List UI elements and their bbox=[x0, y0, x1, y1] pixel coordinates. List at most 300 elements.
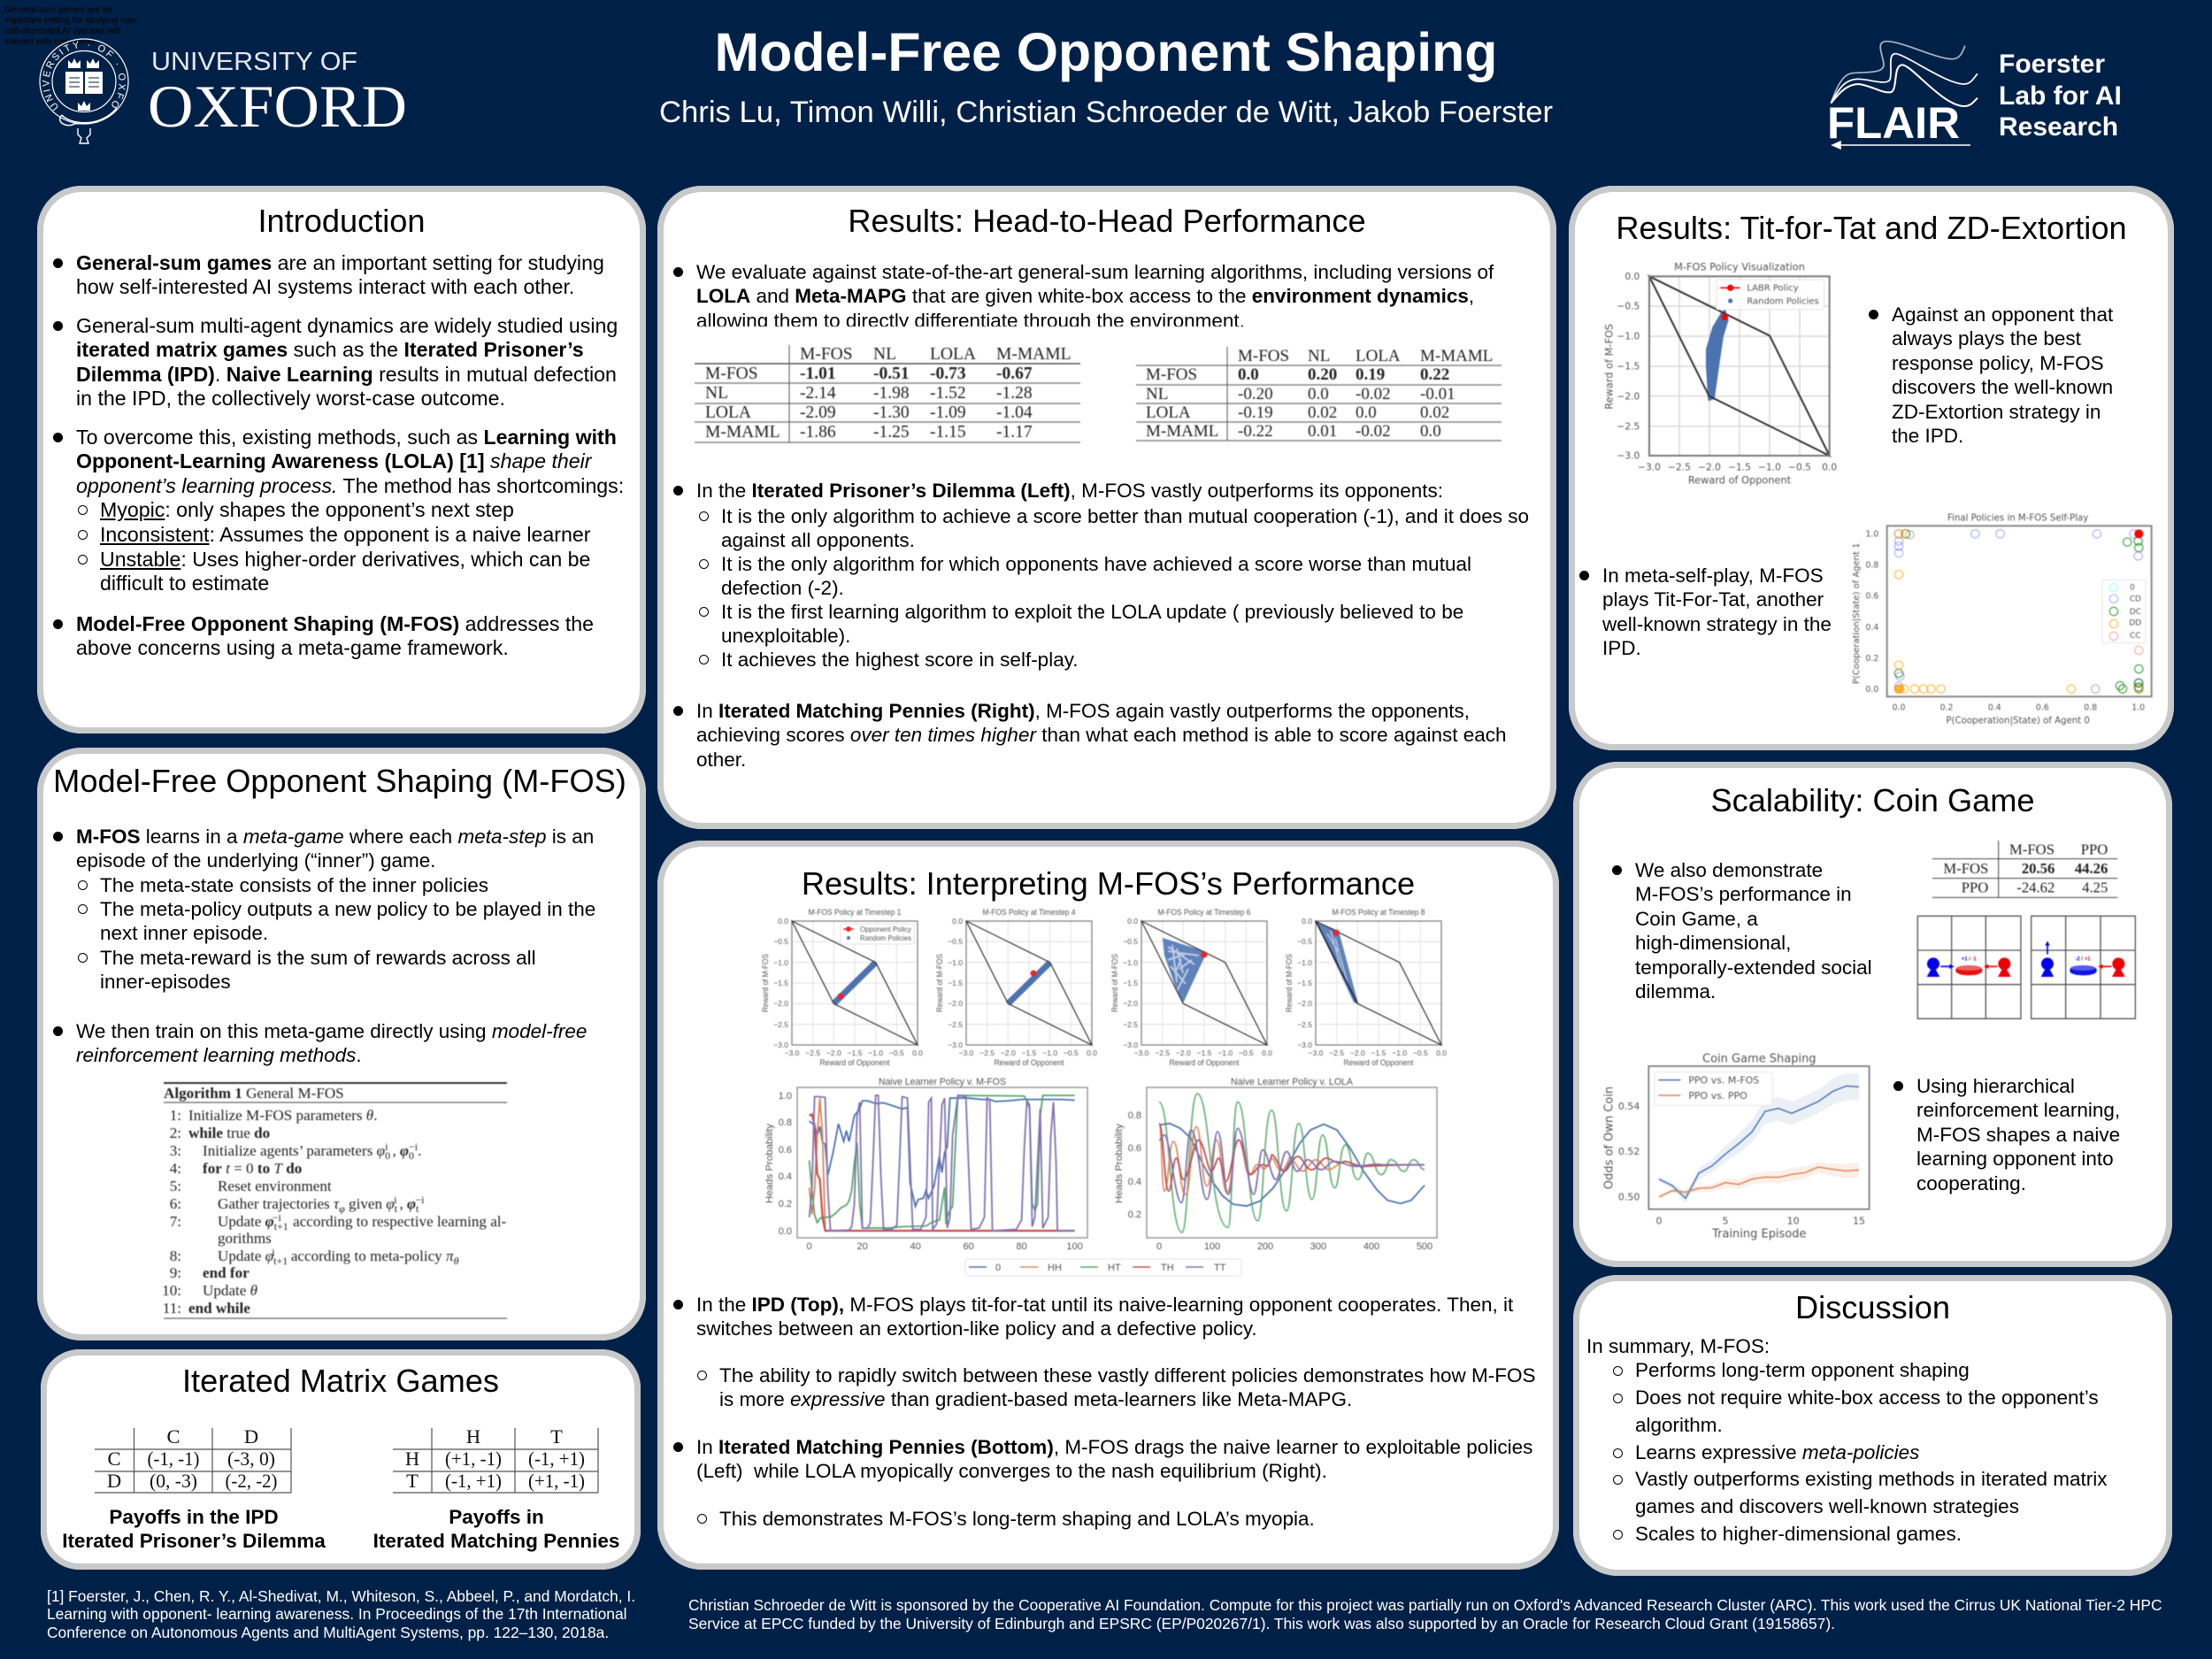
chart: M-FOS policy visualization: −2.5 bbox=[1668, 462, 1691, 473]
chart: naive learner policy v. M-FOS: Naive Learner Policy v. M-FOS bbox=[879, 1077, 1006, 1087]
bullet: ZD-extortion: ZD-Extortion strategy in bbox=[1892, 401, 2101, 423]
chart: policy at timestep 4: −1.0 bbox=[1042, 1048, 1057, 1057]
chart: M-FOS policy visualization: −1.5 bbox=[1728, 462, 1751, 473]
chart: final policies in self-play: CD bbox=[2130, 595, 2141, 603]
algorithm text: 5: bbox=[170, 1178, 181, 1194]
x-axis labels: right chart: 0 bbox=[1156, 1241, 1162, 1252]
chart: naive learner policy v. LOLA: 0.8 bbox=[1128, 1110, 1141, 1121]
bullet: hierarchical RL: cooperating. bbox=[1916, 1172, 2026, 1194]
x-axis labels: right chart: 100 bbox=[1204, 1241, 1220, 1252]
diagram: coin game right bbox=[2032, 916, 2135, 1018]
chart: policy at timestep 8: M-FOS Policy at Timestep 8 bbox=[1333, 908, 1425, 918]
table: IPD results: -1.01 bbox=[800, 365, 836, 383]
chart: naive learner policy v. M-FOS: 0.2 bbox=[779, 1199, 792, 1210]
chart: policy at timestep 6: −1.5 bbox=[1123, 979, 1138, 987]
chart: naive learner policy v. M-FOS: Heads Probability bbox=[764, 1123, 775, 1203]
algorithm text: Update θ bbox=[203, 1282, 257, 1299]
table: IPD results: -1.98 bbox=[873, 384, 910, 403]
algorithm text: while true do bbox=[188, 1125, 270, 1141]
panel: tit-for-tat and ZD-extortion bbox=[1569, 186, 2174, 750]
table: matching pennies results: M-FOS bbox=[1238, 347, 1289, 365]
table: IPD results: -0.67 bbox=[996, 365, 1033, 383]
chart: final policies in self-play: 0.4 bbox=[1988, 703, 2001, 713]
table: IPD payoffs: (-1, -1) bbox=[147, 1448, 200, 1470]
text: lab name bbox=[1999, 50, 2122, 142]
chart: policy at timestep 8 bbox=[1285, 908, 1447, 1068]
table: IPD payoffs: (-2, -2) bbox=[225, 1470, 278, 1492]
x-axis labels: right chart: 400 bbox=[1363, 1241, 1379, 1252]
chart: policy at timestep 8: −2.5 bbox=[1329, 1048, 1344, 1057]
table: coin game results: 20.56 bbox=[2022, 860, 2055, 877]
chart: policy at timestep 4: −2.0 bbox=[1001, 1048, 1016, 1057]
algorithm text: φ bbox=[386, 1195, 395, 1212]
bullet: LOLA: Opponent-Learning Awareness (LOLA) [1] shape their bbox=[76, 449, 591, 472]
x-axis labels: right chart: 200 bbox=[1257, 1241, 1273, 1252]
table: matching pennies payoffs: H bbox=[405, 1448, 419, 1470]
table: coin game results: 4.25 bbox=[2082, 879, 2108, 895]
bullet: ZD-extortion: Against an opponent that bbox=[1892, 303, 2113, 326]
diagram: coin game left bbox=[1917, 916, 2021, 1018]
panel: discussion bbox=[1573, 1275, 2172, 1576]
chart: final policies in self-play: P(Cooperation|State) of Agent 0 bbox=[1946, 716, 2090, 726]
chart: policy at timestep 1: −1.0 bbox=[868, 1048, 883, 1057]
panel: iterated matrix games bbox=[41, 1349, 641, 1570]
sub-bullet: best score: It is the only algorithm to achieve a score better than mutual cooperation (-1), and it does so bbox=[721, 505, 1529, 527]
footer: reference: [1] Foerster, J., Chen, R. Y., Al-Shedivat, M., Whiteson, S., Abbeel, P., and Mordatch, I. bbox=[47, 1587, 635, 1605]
table: IPD results: -0.73 bbox=[930, 365, 966, 383]
chart: naive learner policy v. M-FOS bbox=[764, 1077, 1087, 1238]
sub-bullet: worst for opponents bbox=[721, 552, 1471, 601]
x-axis labels: left chart: 100 bbox=[1066, 1241, 1083, 1252]
bullet: coin game: dilemma. bbox=[1635, 980, 1716, 1002]
bullet: matching pennies results: other. bbox=[696, 749, 746, 771]
chart: coin game shaping: PPO vs. M-FOS bbox=[1688, 1075, 1759, 1087]
sub-bullet: outperforms: Vastly outperforms existing methods in iterated matrix bbox=[1635, 1468, 2108, 1490]
bullet: general-sum games bbox=[76, 251, 604, 300]
chart: policy at timestep 1: −1.5 bbox=[848, 1048, 863, 1057]
overlapping small note: interact with each other. bbox=[4, 37, 98, 47]
sub-bullet: meta-policy bbox=[100, 897, 595, 946]
chart: policy at timestep 8: −0.5 bbox=[1413, 1048, 1428, 1057]
sub-bullet: unstable: difficult to estimate bbox=[100, 572, 269, 595]
algorithm text: end while bbox=[188, 1300, 250, 1317]
bullet: hierarchical RL bbox=[1916, 1074, 2120, 1195]
chart: policy at timestep 8: −1.5 bbox=[1297, 979, 1312, 987]
algorithm text bbox=[162, 1085, 507, 1317]
table: IPD results: -1.28 bbox=[996, 384, 1033, 403]
chart: policy at timestep 8: −3.0 bbox=[1297, 1041, 1312, 1049]
x-axis labels: left chart: 60 bbox=[963, 1241, 974, 1252]
algorithm text: end for bbox=[203, 1264, 250, 1281]
sub-bullet: worst for opponents: defection (-2). bbox=[721, 577, 844, 599]
chart: final policies in self-play: 0.8 bbox=[2084, 703, 2097, 713]
text: lab name: Lab for AI bbox=[1999, 81, 2122, 111]
algorithm text: −i bbox=[415, 1194, 425, 1206]
logo: FLAIR bbox=[1827, 41, 2122, 150]
bullet: IPD top: switches between an extortion-like policy and a defective policy. bbox=[696, 1317, 1257, 1340]
algorithm text: 4: bbox=[170, 1160, 181, 1177]
bullet: ZD-extortion: always plays the best bbox=[1892, 327, 2081, 349]
bullet: multi-agent dynamics bbox=[76, 314, 618, 411]
bullet: tit-for-tat: plays Tit-For-Tat, another bbox=[1602, 588, 1824, 611]
chart: M-FOS policy visualization: Reward of M-FOS bbox=[1602, 324, 1615, 410]
chart: policy at timestep 6: −1.0 bbox=[1217, 1048, 1233, 1057]
chart: policy at timestep 6: −2.5 bbox=[1123, 1020, 1138, 1029]
sub-bullet: best score bbox=[721, 504, 1529, 553]
chart: naive learner policy v. LOLA: Heads Probability bbox=[1114, 1123, 1125, 1203]
chart: M-FOS policy visualization: Reward of Opponent bbox=[1688, 474, 1792, 487]
chart: policy at timestep 8: 0.0 bbox=[1302, 917, 1312, 926]
chart: policy at timestep 8: −1.0 bbox=[1297, 958, 1312, 967]
bullet: hierarchical RL: reinforcement learning, bbox=[1916, 1099, 2120, 1121]
table: IPD results: M-FOS bbox=[800, 345, 853, 364]
sub-bullet: meta-reward bbox=[100, 946, 536, 995]
sub-bullet: exploit LOLA bbox=[721, 600, 1463, 649]
table: matching pennies results: M-FOS bbox=[1146, 365, 1197, 384]
table: IPD results: -1.15 bbox=[930, 423, 966, 442]
table: IPD results: -0.51 bbox=[873, 365, 910, 383]
chart: policy at timestep 4: −1.5 bbox=[1022, 1048, 1037, 1057]
heading: Results: Interpreting M-FOS’s Performance bbox=[802, 865, 1415, 902]
caption: IPD: Iterated Prisoner’s Dilemma bbox=[62, 1530, 326, 1552]
algorithm text: π bbox=[446, 1248, 454, 1264]
algorithm text: for t = 0 to T do bbox=[203, 1160, 302, 1177]
panel: model-free opponent shaping bbox=[37, 748, 646, 1340]
bullet: meta-game: episode of the underlying (“inner”) game. bbox=[76, 849, 435, 872]
chart: policy at timestep 6: −3.0 bbox=[1134, 1048, 1149, 1057]
chart: policy at timestep 6: −0.5 bbox=[1239, 1048, 1254, 1057]
heading: Iterated Matrix Games bbox=[182, 1363, 499, 1399]
sub-bullet: exploit LOLA: It is the first learning algorithm to exploit the LOLA update ( previously believed to be bbox=[721, 601, 1463, 623]
chart: M-FOS policy visualization: −2.0 bbox=[1617, 390, 1640, 402]
bullet: coin game: M-FOS’s performance in bbox=[1635, 883, 1852, 905]
algorithm text: Update φ bbox=[218, 1213, 274, 1230]
chart: coin game shaping: Odds of Own Coin bbox=[1602, 1087, 1616, 1189]
x-axis labels: left chart: 80 bbox=[1016, 1241, 1027, 1252]
table: IPD payoffs: (-3, 0) bbox=[227, 1448, 275, 1470]
chart: policy at timestep 1: M-FOS Policy at Timestep 1 bbox=[809, 908, 901, 918]
chart: coin game shaping: 5 bbox=[1722, 1215, 1728, 1226]
bullet: IPD top: In the IPD (Top), M-FOS plays tit-for-tat until its naive-learning opponent cooperates. Then, it bbox=[696, 1294, 1513, 1316]
table: IPD results: -1.09 bbox=[930, 403, 966, 422]
diagram: coin game left: +1 / -1 bbox=[1962, 956, 1978, 962]
text: FLAIR: FLAIR bbox=[1827, 98, 1960, 148]
chart: final policies in self-play: P(Cooperation|State) of Agent 1 bbox=[1852, 542, 1862, 684]
text: Oxford: OXFORD bbox=[148, 73, 407, 140]
bullet: multi-agent dynamics: in the IPD, the collectively worst-case outcome. bbox=[76, 387, 505, 410]
table: matching pennies results: M-MAML bbox=[1420, 347, 1493, 365]
text: lab name: Foerster bbox=[1999, 50, 2105, 79]
heading: Model-Free Opponent Shaping (M-FOS) bbox=[53, 763, 626, 799]
chart: policy at timestep 8: Reward of M-FOS bbox=[1285, 954, 1294, 1012]
chart: final policies in self-play: 0.2 bbox=[1940, 703, 1953, 713]
legend bbox=[965, 1259, 1241, 1276]
chart: policy at timestep 8: −2.0 bbox=[1350, 1048, 1365, 1057]
table: matching pennies results: LOLA bbox=[1146, 403, 1191, 422]
bullet: hierarchical RL: Using hierarchical bbox=[1916, 1075, 2075, 1097]
table: IPD payoffs: (0, -3) bbox=[150, 1470, 197, 1492]
chart: M-FOS policy visualization: −1.0 bbox=[1758, 462, 1781, 473]
algorithm text: Algorithm 1 General M-FOS bbox=[164, 1085, 344, 1102]
text: University of: UNIVERSITY OF bbox=[151, 48, 357, 76]
table: IPD payoffs: D bbox=[244, 1425, 258, 1448]
caption: matching pennies: Payoffs in bbox=[449, 1506, 544, 1528]
chart: policy at timestep 8: −1.5 bbox=[1371, 1048, 1386, 1057]
legend: HT bbox=[1108, 1263, 1121, 1273]
chart: policy at timestep 4: −0.5 bbox=[1064, 1048, 1079, 1057]
table: coin game results: PPO bbox=[1962, 879, 1988, 895]
chart: naive learner policy v. LOLA: Naive Learner Policy v. LOLA bbox=[1231, 1077, 1354, 1087]
table: matching pennies results: NL bbox=[1146, 385, 1168, 403]
chart: coin game shaping: 0.54 bbox=[1618, 1101, 1640, 1112]
table: IPD results: -1.04 bbox=[996, 403, 1033, 422]
chart: policy at timestep 1: 0.0 bbox=[778, 917, 788, 926]
sub-bullet: unstable: Unstable: Uses higher-order derivatives, which can be bbox=[100, 548, 590, 571]
bullet: meta-game bbox=[76, 825, 594, 873]
table: matching pennies results: -0.22 bbox=[1238, 422, 1273, 441]
chart: naive learner policy v. M-FOS: 0.8 bbox=[779, 1118, 792, 1128]
sub-bullet: meta-state: The meta-state consists of the inner policies bbox=[100, 874, 488, 896]
chart: final policies in self-play: 1.0 bbox=[2131, 703, 2145, 713]
x-axis labels: right chart bbox=[1156, 1241, 1432, 1252]
bullet: multi-agent dynamics: Dilemma (IPD). Naive Learning results in mutual defection bbox=[76, 363, 617, 386]
table: IPD results: -1.52 bbox=[930, 384, 966, 403]
sub-bullet: myopic: Myopic: only shapes the opponent’s next step bbox=[100, 498, 514, 521]
chart: final policies in self-play: 0.6 bbox=[2036, 703, 2049, 713]
bullet: hierarchical RL: learning opponent into bbox=[1916, 1148, 2114, 1170]
algorithm text: 7: bbox=[170, 1213, 181, 1230]
algorithm text: θ bbox=[454, 1255, 459, 1267]
panel: introduction bbox=[37, 186, 646, 733]
algorithm text: 10: bbox=[162, 1282, 181, 1299]
chart: M-FOS policy visualization: −3.0 bbox=[1617, 450, 1640, 462]
chart: M-FOS policy visualization: Random Policies bbox=[1747, 296, 1819, 306]
chart: naive learner policy v. LOLA: 0.4 bbox=[1128, 1177, 1141, 1187]
x-axis labels: left chart: 0 bbox=[807, 1241, 812, 1252]
chart: coin game shaping: 0.52 bbox=[1618, 1146, 1640, 1157]
algorithm text: according to respective learning al- bbox=[289, 1213, 507, 1230]
bullet: ZD-extortion bbox=[1892, 303, 2113, 448]
table: coin game results: M-FOS bbox=[2009, 841, 2055, 857]
table: IPD results: -1.25 bbox=[873, 423, 910, 442]
bullet: hierarchical RL: M-FOS shapes a naive bbox=[1916, 1124, 2120, 1146]
chart: coin game shaping: 0 bbox=[1655, 1215, 1662, 1226]
chart: policy at timestep 4: −3.0 bbox=[959, 1048, 974, 1057]
chart: policy at timestep 4: −2.5 bbox=[948, 1020, 963, 1029]
chart: final policies in self-play: DC bbox=[2130, 608, 2141, 617]
bullet: coin game: Coin Game, a bbox=[1635, 908, 1758, 930]
chart: M-FOS policy visualization: −3.0 bbox=[1638, 462, 1661, 473]
chart: policy at timestep 6: 0.0 bbox=[1262, 1048, 1272, 1057]
chart: policy at timestep 1: −0.5 bbox=[889, 1048, 904, 1057]
icon: Oxford seal bbox=[39, 38, 129, 144]
chart: policy at timestep 4: −0.5 bbox=[948, 937, 963, 946]
chart: final policies in self-play: 0.6 bbox=[1865, 592, 1878, 602]
chart: final policies in self-play: 0 bbox=[2130, 583, 2135, 592]
table: matching pennies results: -0.02 bbox=[1356, 385, 1391, 403]
table: matching pennies results: LOLA bbox=[1356, 347, 1401, 365]
footer: acknowledgements bbox=[688, 1596, 2162, 1632]
sub-bullet: no white-box bbox=[1635, 1385, 2099, 1440]
algorithm text: −i bbox=[273, 1211, 282, 1224]
chart: M-FOS policy visualization: −0.5 bbox=[1788, 462, 1811, 473]
table: IPD payoffs: C bbox=[166, 1425, 180, 1448]
chart: policy at timestep 6: M-FOS Policy at Timestep 6 bbox=[1157, 908, 1251, 918]
algorithm text: 9: bbox=[170, 1264, 181, 1281]
table: IPD payoffs: D bbox=[107, 1470, 121, 1492]
algorithm text: t bbox=[416, 1202, 419, 1215]
table: coin game results bbox=[1932, 841, 2117, 897]
chart: M-FOS policy visualization: −0.5 bbox=[1617, 301, 1640, 312]
algorithm text: 0 bbox=[385, 1149, 390, 1162]
heading: Discussion bbox=[1795, 1289, 1950, 1325]
chart: coin game shaping bbox=[1602, 1053, 1870, 1240]
sub-bullet: meta-policy: next inner episode. bbox=[100, 922, 268, 944]
text: lab name: Research bbox=[1999, 112, 2118, 142]
table: matching pennies results: NL bbox=[1308, 347, 1330, 365]
logo: University of Oxford bbox=[39, 38, 407, 144]
sub-bullet: exploit LOLA: unexploitable). bbox=[721, 625, 850, 647]
chart: M-FOS policy visualization bbox=[1602, 260, 1837, 487]
chart: policy at timestep 6: Reward of Opponent bbox=[1170, 1058, 1240, 1068]
overlapping small note: General-sum games are an bbox=[4, 5, 112, 15]
sub-bullet: meta-reward: inner-episodes bbox=[100, 971, 231, 993]
figure: interpretation charts bbox=[761, 908, 1448, 1239]
chart: policy at timestep 1: −0.5 bbox=[773, 937, 788, 946]
chart: final policies in self-play: 0.2 bbox=[1865, 654, 1878, 664]
algorithm text: −i bbox=[409, 1141, 419, 1153]
summary intro: In summary, M-FOS: bbox=[1586, 1335, 1770, 1357]
table: IPD payoffs: C bbox=[107, 1448, 121, 1470]
chart: policy at timestep 1: −2.0 bbox=[826, 1048, 841, 1057]
algorithm text: gorithms bbox=[218, 1230, 272, 1247]
chart: final policies in self-play: 0.4 bbox=[1865, 623, 1878, 633]
table: IPD results: -1.30 bbox=[873, 403, 910, 422]
bullet: IPD results: In the Iterated Prisoner’s Dilemma (Left), M-FOS vastly outperforms its opponents: bbox=[696, 480, 1443, 502]
chart: final policies in self-play: CC bbox=[2130, 632, 2141, 641]
overlapping small note: important setting for studying how bbox=[4, 16, 137, 26]
bullet: evaluation: allowing them to directly differentiate through the environment. bbox=[696, 310, 1245, 332]
sub-bullet: self-play: It achieves the highest score in self-play. bbox=[721, 649, 1079, 671]
bullet: train: reinforcement learning methods. bbox=[76, 1044, 362, 1066]
chart: policy at timestep 1: −2.5 bbox=[773, 1020, 788, 1029]
chart: policy at timestep 8: 0.0 bbox=[1436, 1048, 1447, 1057]
algorithm text: , bbox=[399, 1195, 407, 1212]
title: Model-Free Opponent Shaping bbox=[715, 22, 1497, 82]
chart: policy at timestep 6: −2.0 bbox=[1176, 1048, 1191, 1057]
bullet: coin game bbox=[1635, 858, 1872, 1003]
panel: head-to-head performance bbox=[657, 186, 1556, 829]
chart: final policies in self-play: 0.0 bbox=[1865, 685, 1878, 695]
bullet: matching pennies results: In Iterated Matching Pennies (Right), M-FOS again vastly outperforms the opponents, bbox=[696, 700, 1470, 722]
chart: policy at timestep 1: 0.0 bbox=[912, 1048, 923, 1057]
table: coin game results: M-FOS bbox=[1943, 860, 1988, 877]
bullet: general-sum games: how self-interested AI systems interact with each other. bbox=[76, 275, 574, 298]
heading: Scalability: Coin Game bbox=[1710, 782, 2035, 818]
bullet: IPD top bbox=[696, 1293, 1513, 1341]
chart: policy at timestep 1: Opponent Policy bbox=[860, 925, 912, 933]
chart: final policies in self-play: Final Policies in M-FOS Self-Play bbox=[1947, 514, 2088, 524]
algorithm text: i bbox=[394, 1194, 397, 1206]
bullet: tit-for-tat: well-known strategy in the bbox=[1602, 613, 1832, 635]
sub-bullet: outperforms: games and discovers well-known strategies bbox=[1635, 1495, 2019, 1517]
sub-bullet: long-term shaping: This demonstrates M-FOS’s long-term shaping and LOLA’s myopia. bbox=[719, 1508, 1315, 1530]
algorithm text: 3: bbox=[170, 1142, 181, 1159]
chart: policy at timestep 1: −3.0 bbox=[785, 1048, 800, 1057]
table: IPD results: NL bbox=[705, 384, 728, 403]
chart: coin game shaping: 10 bbox=[1787, 1215, 1800, 1226]
payoff tables bbox=[62, 1425, 619, 1552]
bullet: evaluation: We evaluate against state-of-the-art general-sum learning algorithms, including versions of bbox=[696, 261, 1494, 283]
chart: policy at timestep 8: −1.0 bbox=[1392, 1048, 1407, 1057]
sub-bullet: worst for opponents: It is the only algorithm for which opponents have achieved a score worse than mutual bbox=[721, 553, 1471, 575]
caption: matching pennies: Iterated Matching Pennies bbox=[373, 1530, 619, 1552]
heading: Results: Tit-for-Tat and ZD-Extortion bbox=[1616, 210, 2127, 246]
chart: M-FOS policy visualization: −1.0 bbox=[1617, 331, 1640, 342]
algorithm text: Gather trajectories τ bbox=[218, 1195, 339, 1212]
chart: policy at timestep 4: 0.0 bbox=[1087, 1048, 1097, 1057]
sub-bullet: no white-box: Does not require white-box access to the opponent’s bbox=[1635, 1386, 2099, 1409]
bullet: matching pennies results bbox=[696, 699, 1507, 772]
table: matching pennies results: 0.02 bbox=[1308, 403, 1337, 422]
algorithm text: t+1 bbox=[274, 1220, 288, 1233]
chart: M-FOS policy visualization: −2.5 bbox=[1617, 420, 1640, 432]
table: matching pennies results: 0.0 bbox=[1356, 403, 1377, 422]
bullet: coin game: temporally-extended social bbox=[1635, 956, 1872, 979]
chart: naive learner policy v. LOLA bbox=[1114, 1077, 1437, 1238]
bullet: matching pennies results: achieving scores over ten times higher than what each method is able to score against each bbox=[696, 724, 1507, 746]
algorithm text: Reset environment bbox=[218, 1178, 332, 1194]
bullet: evaluation: LOLA and Meta-MAPG that are given white-box access to the environment dynamics, bbox=[696, 285, 1474, 307]
chart: M-FOS policy visualization: LABR Policy bbox=[1747, 284, 1799, 294]
chart: final policies in self-play bbox=[1851, 513, 2154, 726]
footer: reference bbox=[47, 1587, 635, 1641]
bullet: tit-for-tat: In meta-self-play, M-FOS bbox=[1602, 565, 1824, 587]
sub-bullet: shaping: Performs long-term opponent shaping bbox=[1635, 1359, 1970, 1381]
chart: policy at timestep 8: −2.0 bbox=[1297, 999, 1312, 1008]
chart: naive learner policy v. M-FOS: 0.6 bbox=[779, 1145, 792, 1156]
table: matching pennies results: 0.19 bbox=[1356, 365, 1385, 384]
algorithm text: 2: bbox=[170, 1125, 181, 1141]
caption: IPD bbox=[62, 1506, 326, 1552]
algorithm text: i bbox=[385, 1141, 388, 1153]
bullet: M-FOS: above concerns using a meta-game framework. bbox=[76, 636, 509, 659]
bullet: multi-agent dynamics: iterated matrix games such as the Iterated Prisoner’s bbox=[76, 338, 584, 361]
footer: acknowledgements: Service at EPCC funded by the University of Edinburgh and EPSRC (EP/P020267/1). This work was also supported by an Oracle for Research Cloud Grant (19158657). bbox=[688, 1615, 1835, 1632]
bullet: M-FOS: Model-Free Opponent Shaping (M-FOS) addresses the bbox=[76, 612, 594, 635]
table: IPD results: M-MAML bbox=[996, 345, 1071, 364]
bullet: general-sum games: General-sum games are an important setting for studying bbox=[76, 251, 604, 274]
algorithm text: φ bbox=[407, 1195, 416, 1212]
chart: coin game shaping: Coin Game Shaping bbox=[1702, 1053, 1816, 1066]
bullet: tit-for-tat bbox=[1602, 564, 1832, 661]
table: matching pennies results: 0.02 bbox=[1420, 403, 1449, 422]
chart: policy at timestep 1: Reward of Opponent bbox=[819, 1058, 890, 1068]
table: IPD results bbox=[695, 345, 1080, 442]
legend: TH bbox=[1161, 1263, 1174, 1273]
heading: Introduction bbox=[257, 203, 426, 239]
bullet: matching pennies bottom bbox=[696, 1435, 1532, 1484]
sub-bullet: meta-policies: Learns expressive meta-policies bbox=[1635, 1441, 1919, 1463]
sub-bullet: no white-box: algorithm. bbox=[1635, 1414, 1723, 1436]
chart: policy at timestep 6: −3.0 bbox=[1123, 1041, 1138, 1049]
bullet: evaluation bbox=[696, 260, 1494, 333]
chart: policy at timestep 8: −2.5 bbox=[1297, 1020, 1312, 1029]
table: matching pennies payoffs: (+1, -1) bbox=[445, 1448, 502, 1470]
bullet: coin game: We also demonstrate bbox=[1635, 859, 1823, 881]
table: IPD results: M-MAML bbox=[705, 423, 780, 442]
chart: policy at timestep 1: −2.5 bbox=[805, 1048, 820, 1057]
